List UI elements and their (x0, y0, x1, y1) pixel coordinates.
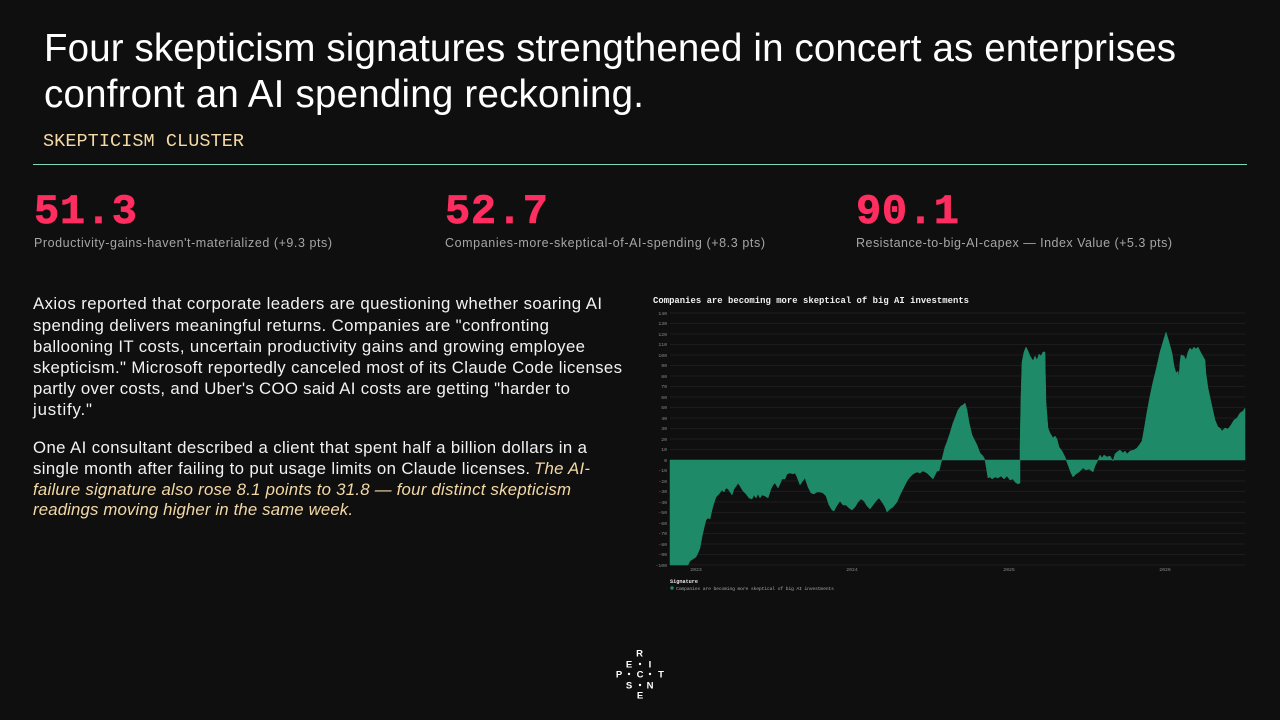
body paragraph one: ballooning IT costs, uncertain productivity gains and growing employee (33, 337, 585, 356)
y axis labels: -100 (655, 563, 667, 569)
stat: capex resistance: Resistance-to-big-AI-capex — Index Value (+5.3 pts) (856, 236, 1172, 250)
body paragraph two (33, 438, 590, 519)
body paragraph one: spending delivers meaningful returns. Companies are "confronting (33, 316, 549, 335)
y axis labels: -80 (658, 542, 667, 548)
y axis labels: 10 (661, 447, 667, 453)
y axis labels: 60 (661, 395, 667, 401)
area series (670, 332, 1245, 565)
logo: PRESCIENT (616, 648, 664, 702)
logo: PRESCIENT: E (626, 660, 632, 670)
body paragraph two: single month after failing to put usage limits on Claude licenses. (33, 459, 530, 478)
x axis labels: 2023 (690, 567, 702, 573)
y axis labels: 120 (658, 332, 667, 338)
title (44, 27, 1176, 116)
body paragraph one: Axios reported that corporate leaders are questioning whether soaring AI (33, 294, 602, 313)
stat: capex resistance: 90.1 (856, 188, 959, 236)
logo: PRESCIENT: I (649, 660, 651, 670)
logo: PRESCIENT: S (626, 680, 632, 692)
body paragraph two: readings moving higher in the same week. (33, 500, 353, 519)
stat: productivity gains: Productivity-gains-haven't-materialized (+9.3 pts) (34, 236, 332, 250)
y axis labels: 100 (658, 353, 667, 359)
stat: companies more skeptical: Companies-more-skeptical-of-AI-spending (+8.3 pts) (445, 236, 765, 250)
y axis labels: 90 (661, 363, 667, 369)
section label: SKEPTICISM CLUSTER (43, 131, 244, 152)
y axis labels: -90 (658, 552, 667, 558)
logo: PRESCIENT: C (637, 670, 644, 680)
y axis labels: -30 (658, 489, 667, 495)
body paragraph one: justify." (32, 400, 92, 419)
x axis labels: 2025 (1003, 567, 1015, 573)
y axis labels: -50 (658, 510, 667, 516)
body paragraph two: One AI consultant described a client that spent half a billion dollars in a (33, 438, 588, 457)
x axis labels (690, 567, 1171, 573)
legend (670, 579, 834, 592)
y axis labels: 0 (664, 458, 667, 464)
y axis labels: -20 (658, 479, 667, 485)
title: confront an AI spending reckoning. (44, 73, 644, 116)
chart title: Companies are becoming more skeptical of big AI investments (653, 296, 969, 306)
y axis labels: 80 (661, 374, 667, 380)
logo: PRESCIENT: P (616, 670, 623, 680)
stat: productivity gains (34, 188, 332, 250)
legend: Companies are becoming more skeptical of big AI investments (676, 586, 834, 592)
y axis labels: 20 (661, 437, 667, 443)
body paragraph one: partly over costs, and Uber's COO said AI costs are getting "harder to (33, 379, 570, 398)
logo: PRESCIENT: E (637, 690, 643, 702)
y axis labels: 130 (658, 321, 667, 327)
logo: PRESCIENT: N (647, 680, 654, 692)
stat: capex resistance (856, 188, 1172, 250)
y axis labels: 70 (661, 384, 667, 390)
body paragraph two: failure signature also rose 8.1 points to 31.8 — four distinct skepticism (33, 480, 571, 499)
stat: companies more skeptical (445, 188, 765, 250)
y axis labels: -60 (658, 521, 667, 527)
title: Four skepticism signatures strengthened in concert as enterprises (44, 27, 1176, 70)
y axis labels: 50 (661, 405, 667, 411)
y axis labels: -70 (658, 531, 667, 537)
y axis labels: 140 (658, 311, 667, 317)
logo: PRESCIENT: R (636, 648, 643, 660)
y axis labels: 30 (661, 426, 667, 432)
y axis labels: 40 (661, 416, 667, 422)
y axis labels: 110 (658, 342, 667, 348)
legend: Signature (670, 579, 698, 585)
body paragraph one: skepticism." Microsoft reportedly canceled most of its Claude Code licenses (33, 358, 622, 377)
y axis labels: -10 (658, 468, 667, 474)
stat: productivity gains: 51.3 (34, 188, 137, 236)
body paragraph two: The AI- (534, 459, 590, 478)
x axis labels: 2026 (1159, 567, 1171, 573)
body paragraph one (32, 294, 622, 419)
x axis labels: 2024 (846, 567, 858, 573)
y axis labels (655, 311, 667, 569)
logo: PRESCIENT: T (658, 670, 664, 680)
y axis labels: -40 (658, 500, 667, 506)
stat: companies more skeptical: 52.7 (445, 188, 548, 236)
chart: skeptical of big AI investments (653, 296, 1245, 592)
